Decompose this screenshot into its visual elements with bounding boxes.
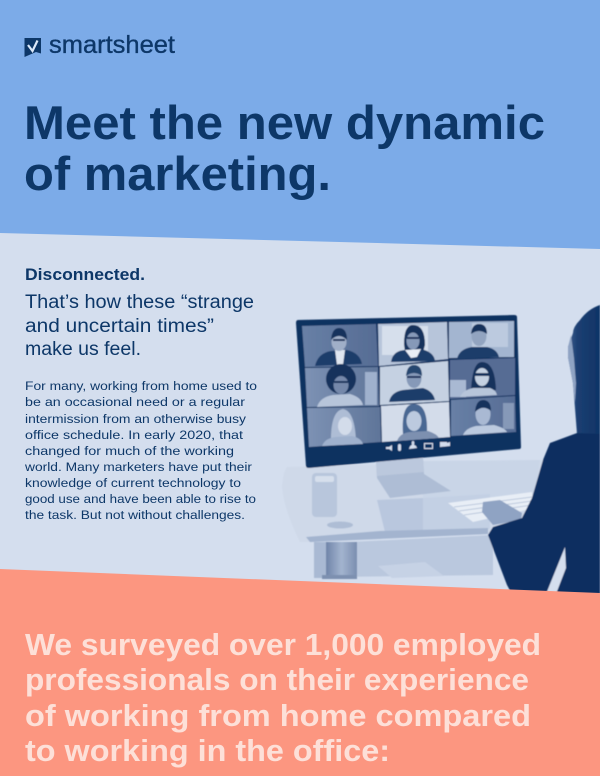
title: of marketing.	[24, 147, 331, 200]
survey headline: We surveyed over 1,000 employed	[25, 627, 541, 662]
body paragraph: the task. But not without challenges.	[25, 508, 245, 522]
woman silhouette	[488, 305, 600, 600]
panel: blue header band	[0, 0, 600, 249]
survey headline: of working from home compared	[25, 698, 531, 733]
body paragraph: For many, working from home used to	[25, 379, 257, 393]
monitor stand	[376, 458, 451, 498]
call controls	[386, 441, 450, 451]
lead text: make us feel.	[25, 339, 141, 360]
body paragraph: changed for much of the working	[25, 444, 234, 458]
monitor	[296, 315, 521, 468]
body paragraph: good use and have been able to rise to	[25, 492, 256, 506]
lead text: and uncertain times”	[25, 316, 214, 337]
body paragraph: office schedule. In early 2020, that	[25, 428, 244, 442]
body paragraph: world. Many marketers have put their	[24, 460, 252, 474]
panel: intro text	[24, 265, 260, 522]
illustration: person at video call desk	[282, 305, 600, 600]
body paragraph: knowledge of current technology to	[25, 476, 241, 490]
title: Meet the new dynamic	[24, 96, 545, 149]
body paragraph: be an occasional need or a regular	[25, 395, 245, 409]
icon: smartsheet check mark	[24, 38, 41, 57]
hand	[482, 500, 522, 525]
lead text: That’s how these “strange	[25, 292, 254, 313]
logo: smartsheet: smartsheet	[49, 31, 175, 59]
subheading: Disconnected: Disconnected.	[25, 265, 145, 284]
whiteboard backgrounds	[382, 326, 428, 355]
survey headline: professionals on their experience	[25, 662, 529, 697]
keyboard	[448, 492, 534, 522]
video call tiles	[302, 321, 516, 447]
participants	[315, 324, 507, 446]
body paragraph: intermission from an otherwise busy	[25, 412, 247, 426]
survey headline: to working in the office:	[25, 733, 390, 768]
desk	[282, 460, 548, 579]
panel: salmon survey band	[0, 569, 600, 776]
